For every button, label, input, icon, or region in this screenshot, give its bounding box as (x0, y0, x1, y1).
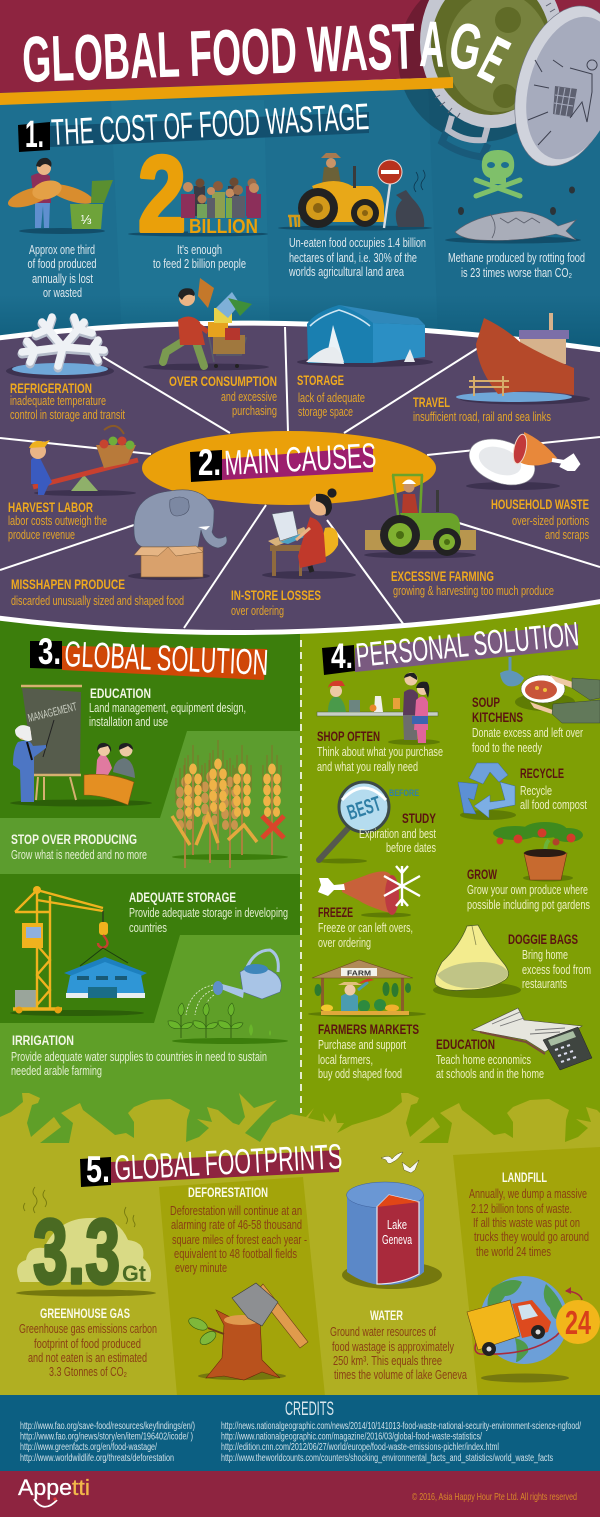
icon: lake geneva cylinder: Lake (387, 1217, 407, 1232)
text: education at home: at schools and in the home (436, 1067, 544, 1081)
text: adequate storage (129, 890, 288, 935)
text: irrigation: IRRIGATION (12, 1033, 74, 1048)
icon: watering can and seedlings (168, 950, 288, 1044)
text: methane (448, 251, 585, 280)
text: water: food wastage is approximately (332, 1340, 455, 1354)
text: farmers markets: local farmers, (318, 1053, 373, 1067)
title banner (0, 0, 600, 93)
text: greenhouse gas (19, 1305, 157, 1379)
icon: tractor, sign and garbage bag (278, 153, 432, 230)
section 2: main causes (6, 278, 590, 618)
text: water: WATER (370, 1307, 403, 1323)
heading: section 5: 5. (86, 1149, 110, 1190)
links: right column: http://www.nationalgeographic.com/magazine/2016/03/global-food-waste-statistics/ (221, 1432, 482, 1442)
text: harvest labor (8, 499, 107, 542)
text: refrigeration: control in storage and transit (10, 408, 125, 422)
icon: lake geneva cylinder (342, 1182, 442, 1289)
icon: axe in tree stump (187, 1283, 308, 1380)
text: excessive farming: EXCESSIVE FARMING (391, 568, 494, 584)
text: education: installation and use (89, 715, 168, 729)
icon: leaking warehouse (297, 305, 433, 367)
text: one third: of food produced (28, 257, 97, 271)
text: one third (28, 243, 97, 300)
icon: teacher with management board (10, 686, 152, 806)
text: education at home: EDUCATION (436, 1037, 495, 1052)
section 4: personal solution (308, 615, 600, 1081)
icon: farmer on green tractor with hay (364, 475, 476, 558)
text: recycle: RECYCLE (520, 766, 564, 781)
text: landfill: LANDFILL (502, 1169, 547, 1185)
links: right column: http://edition.cnn.com/2012/06/27/world/europe/food-waste-emissions-pichler/index.html (221, 1442, 499, 1453)
text: refrigeration (10, 380, 125, 422)
text: feed 2 billion: It's enough (177, 243, 222, 257)
text: recycle: Recycle (520, 784, 552, 798)
text: shop often: Think about what you purchase (317, 745, 443, 759)
heading: section 2: MAIN CAUSES (223, 436, 377, 483)
icon: tomato plant in a pot (493, 822, 583, 882)
section 3: global solution (10, 631, 288, 1078)
text: farmers markets: Purchase and support (318, 1038, 406, 1052)
text: water: Ground water resources of (330, 1325, 436, 1339)
text: irrigation (11, 1033, 267, 1078)
text: study: before dates (386, 841, 436, 855)
text: greenhouse gas: GREENHOUSE GAS (40, 1305, 130, 1321)
icon: truck circling the globe (467, 1276, 600, 1382)
text: over consumption: purchasing (232, 404, 277, 418)
text: freeze: over ordering (318, 936, 371, 950)
links: left column: http://www.worldwildlife.org/threats/deforestation (20, 1453, 174, 1464)
text: deforestation: equivalent to 48 football fields (174, 1247, 297, 1261)
text: deforestation: Deforestation will continue at an (170, 1204, 302, 1218)
text: freeze: Freeze or can left overs, (318, 921, 413, 935)
text: deforestation: DEFORESTATION (188, 1184, 268, 1200)
text: soup kitchens: SOUP (472, 695, 500, 710)
text: adequate storage: ADEQUATE STORAGE (129, 890, 236, 905)
text: farmers markets: buy odd shaped food (318, 1067, 402, 1081)
text: soup kitchens: KITCHENS (472, 710, 523, 725)
background: food silhouettes and section 5 (0, 1093, 600, 1400)
text: study: STUDY (402, 811, 436, 826)
icon: lake geneva cylinder: Geneva (382, 1232, 412, 1247)
heading: section 3: 3. (38, 631, 61, 672)
icon: skull and crossbones over rotting fish (445, 150, 581, 244)
text: education at home (436, 1037, 544, 1081)
text: storage: lack of adequate (298, 391, 365, 405)
heading: section 2 (190, 436, 377, 483)
icon: magnifier on best before: BEST (344, 792, 384, 825)
text: harvest labor: labor costs outweigh the (8, 514, 107, 528)
text: education (89, 686, 246, 729)
background: dashed divider (300, 640, 302, 1113)
text: un-eaten food: hectares of land, i.e. 30% of the (289, 251, 417, 265)
heading: section 1 (18, 96, 370, 156)
text: greenhouse gas: Greenhouse gas emissions carbon (19, 1322, 157, 1336)
text: shop often: SHOP OFTEN (317, 729, 380, 744)
text: misshapen produce (11, 576, 184, 608)
icon: soup bowl and ladle (500, 657, 600, 723)
heading: section 3 (30, 631, 269, 683)
text: over consumption: and excessive (221, 390, 277, 404)
section 1: the cost of food wastage (6, 96, 585, 300)
icon: magnifier on best before (317, 782, 419, 864)
icon: ship stranded at a dock (456, 313, 590, 404)
icon: 3.3 Gt cloud: 3.3 (33, 1201, 120, 1303)
text: education: EDUCATION (90, 686, 151, 701)
text: education: Land management, equipment design, (89, 701, 246, 715)
icon: teacher with management board: MANAGEMENT (27, 701, 78, 725)
heading: section 5: GLOBAL FOOTPRINTS (113, 1137, 343, 1188)
links: right column (221, 1421, 581, 1464)
panel: main causes disc (0, 323, 600, 633)
text: in-store losses (231, 587, 321, 618)
icon: man throwing bread in bin: ⅓ (81, 212, 92, 227)
icon: magnifier on best before: BEFORE (389, 788, 419, 798)
text: storage (297, 372, 365, 419)
text: misshapen produce: discarded unusually sized and shaped food (11, 594, 184, 608)
text: in-store losses: IN-STORE LOSSES (231, 587, 321, 603)
icon: trash can lid (498, 0, 600, 178)
text: harvest labor: produce revenue (8, 528, 75, 542)
text: education at home: Teach home economics (436, 1053, 531, 1067)
text: feed 2 billion (153, 243, 246, 271)
links: left column: http://www.fao.org/save-food/resources/keyfindings/en/) (20, 1421, 195, 1432)
text: doggie bags: Bring home (522, 948, 568, 962)
text: freeze (318, 905, 413, 950)
icon: farm market stall (308, 960, 426, 1017)
text: excessive farming (391, 568, 554, 598)
heading: section 3: GLOBAL SOLUTION (64, 633, 269, 683)
text: one third: Approx one third (29, 243, 95, 257)
icon: melting snowflake (6, 317, 114, 379)
text: soup kitchens (472, 695, 583, 755)
icon: man throwing bread in bin (6, 158, 113, 234)
text: over consumption: OVER CONSUMPTION (169, 373, 277, 389)
text: household waste (491, 496, 589, 542)
title: E (469, 22, 520, 97)
background: teal section (0, 80, 600, 360)
icon: 3.3 Gt cloud: Gt (122, 1261, 147, 1286)
icon: 2 billion people: 2 (138, 133, 186, 254)
text: stop over producing: STOP OVER PRODUCING (11, 832, 137, 847)
text: stop over producing (11, 832, 147, 862)
text: doggie bags (508, 932, 591, 991)
icon: 2 billion people (128, 133, 268, 254)
text: one third: annually is lost (32, 272, 93, 286)
text: deforestation: every minute (175, 1261, 227, 1275)
icon: crane lifting warehouse (10, 886, 147, 1016)
text: irrigation: Provide adequate water supplies to countries in need to sustain (11, 1050, 267, 1064)
links: left column (20, 1421, 195, 1464)
text: water (330, 1307, 467, 1382)
text: shop often: and what you really need (317, 760, 418, 774)
text: un-eaten food: worlds agricultural land area (288, 265, 404, 279)
text: landfill: the world 24 times (476, 1245, 551, 1259)
text: adequate storage: Provide adequate storage in developing (129, 906, 288, 920)
text: doggie bags: restaurants (522, 977, 567, 991)
text: study: Expiration and best (359, 827, 436, 841)
text: freeze: FREEZE (318, 905, 353, 920)
text: irrigation: needed arable farming (11, 1064, 102, 1078)
icon: doggie bag (433, 925, 521, 998)
text: farmers markets: FARMERS MARKETS (318, 1022, 419, 1037)
text: travel: TRAVEL (413, 394, 450, 410)
icon: farm market stall: FARM (347, 968, 371, 978)
orange band (0, 77, 453, 105)
text: one third: or wasted (43, 286, 82, 300)
text: deforestation: alarming rate of 46-58 thousand (171, 1218, 302, 1232)
center oval (142, 431, 436, 505)
heading: section 5 (80, 1137, 343, 1190)
text: water: times the volume of lake Geneva (334, 1368, 467, 1382)
icon: 2 billion people: BILLION (189, 216, 258, 238)
text: misshapen produce: MISSHAPEN PRODUCE (11, 576, 125, 592)
heading: credits: CREDITS (285, 1399, 334, 1420)
icon: plate with ham (463, 431, 578, 493)
text: farmers markets (318, 1022, 419, 1081)
icon: frozen ham (318, 866, 420, 918)
icon: woman at a laptop (262, 488, 356, 579)
section 5: global footprints (16, 1137, 600, 1382)
icon: elephant in a box (128, 490, 227, 580)
text: storage: storage space (298, 405, 353, 419)
text: in-store losses: over ordering (231, 604, 284, 618)
icon: birds (381, 1152, 419, 1173)
text: greenhouse gas: footprint of food produced (34, 1337, 141, 1351)
text: refrigeration: REFRIGERATION (10, 380, 92, 396)
text: study (359, 811, 436, 855)
text: water: 250 km³. This equals three (333, 1354, 442, 1368)
text: feed 2 billion: to feed 2 billion people (153, 257, 246, 271)
text: over consumption (169, 373, 277, 418)
title: A (419, 7, 446, 81)
links: left column: http://www.greenfacts.org/en/food-wastage/ (20, 1442, 157, 1453)
icon: open book and calculator (472, 1008, 592, 1070)
text: un-eaten food (288, 236, 426, 279)
text: travel (413, 394, 551, 424)
text: un-eaten food: Un-eaten food occupies 1.4 billion (289, 236, 426, 250)
text: harvest labor: HARVEST LABOR (8, 499, 93, 515)
heading: section 4 (322, 615, 581, 676)
footer (0, 1471, 600, 1517)
text: shop often (317, 729, 443, 774)
text: refrigeration: inadequate temperature (10, 394, 106, 408)
heading: section 2: 2. (198, 442, 221, 483)
icon: wheat field with red cross (172, 740, 288, 868)
background: section 4 personal solution (300, 590, 600, 1160)
section: credits (0, 1395, 600, 1471)
text: landfill (469, 1169, 589, 1259)
text: grow (467, 867, 590, 912)
text: greenhouse gas: and not eaten is an estimated (28, 1351, 147, 1365)
heading: section 1: THE COST OF FOOD WASTAGE (50, 96, 370, 153)
text: deforestation (170, 1184, 307, 1275)
text: recycle (520, 766, 587, 812)
heading: section 1: 1. (25, 114, 44, 156)
links: left column: http://www.fao.org/news/story/en/item/196402/icode/ ) (20, 1432, 193, 1442)
text: grow: GROW (467, 867, 497, 882)
text: deforestation: square miles of forest each year - (172, 1233, 307, 1247)
text: soup kitchens: food to the needy (472, 741, 543, 755)
text: travel: insufficient road, rail and sea links (413, 410, 551, 424)
icon: shop counter with cashier and couple (317, 672, 440, 745)
text: storage: STORAGE (297, 372, 344, 388)
background: section 3 global solution (0, 590, 300, 1160)
text: stop over producing: Grow what is needed and no more (11, 848, 147, 862)
icon: shopper with overloaded cart (143, 278, 269, 370)
logo: appetti: Appetti (18, 1475, 90, 1500)
icon: trash can (398, 0, 564, 157)
text: greenhouse gas: 3.3 Gtonnes of CO₂ (49, 1365, 127, 1379)
text: adequate storage: countries (129, 921, 167, 935)
icon: recycle arrows (458, 763, 516, 820)
title: G (443, 7, 489, 85)
heading: section 4: 4. (331, 637, 353, 676)
icon: labourer on seesaw with basket (29, 426, 138, 496)
